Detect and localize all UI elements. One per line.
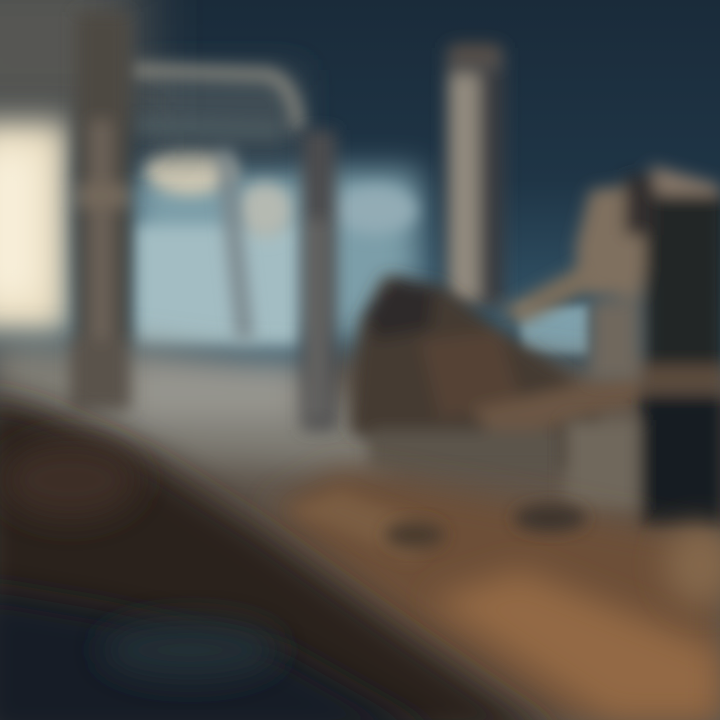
right tall tower <box>446 44 504 308</box>
dark foreground slope <box>0 395 560 720</box>
middle tower <box>302 130 336 430</box>
arched frame structure <box>130 70 298 340</box>
bright sunlight at left edge <box>0 0 140 335</box>
right machine <box>565 165 720 530</box>
left tower <box>70 12 130 410</box>
mid-ground base <box>0 340 720 720</box>
sandy ground <box>270 470 720 720</box>
central machinery <box>350 255 650 470</box>
